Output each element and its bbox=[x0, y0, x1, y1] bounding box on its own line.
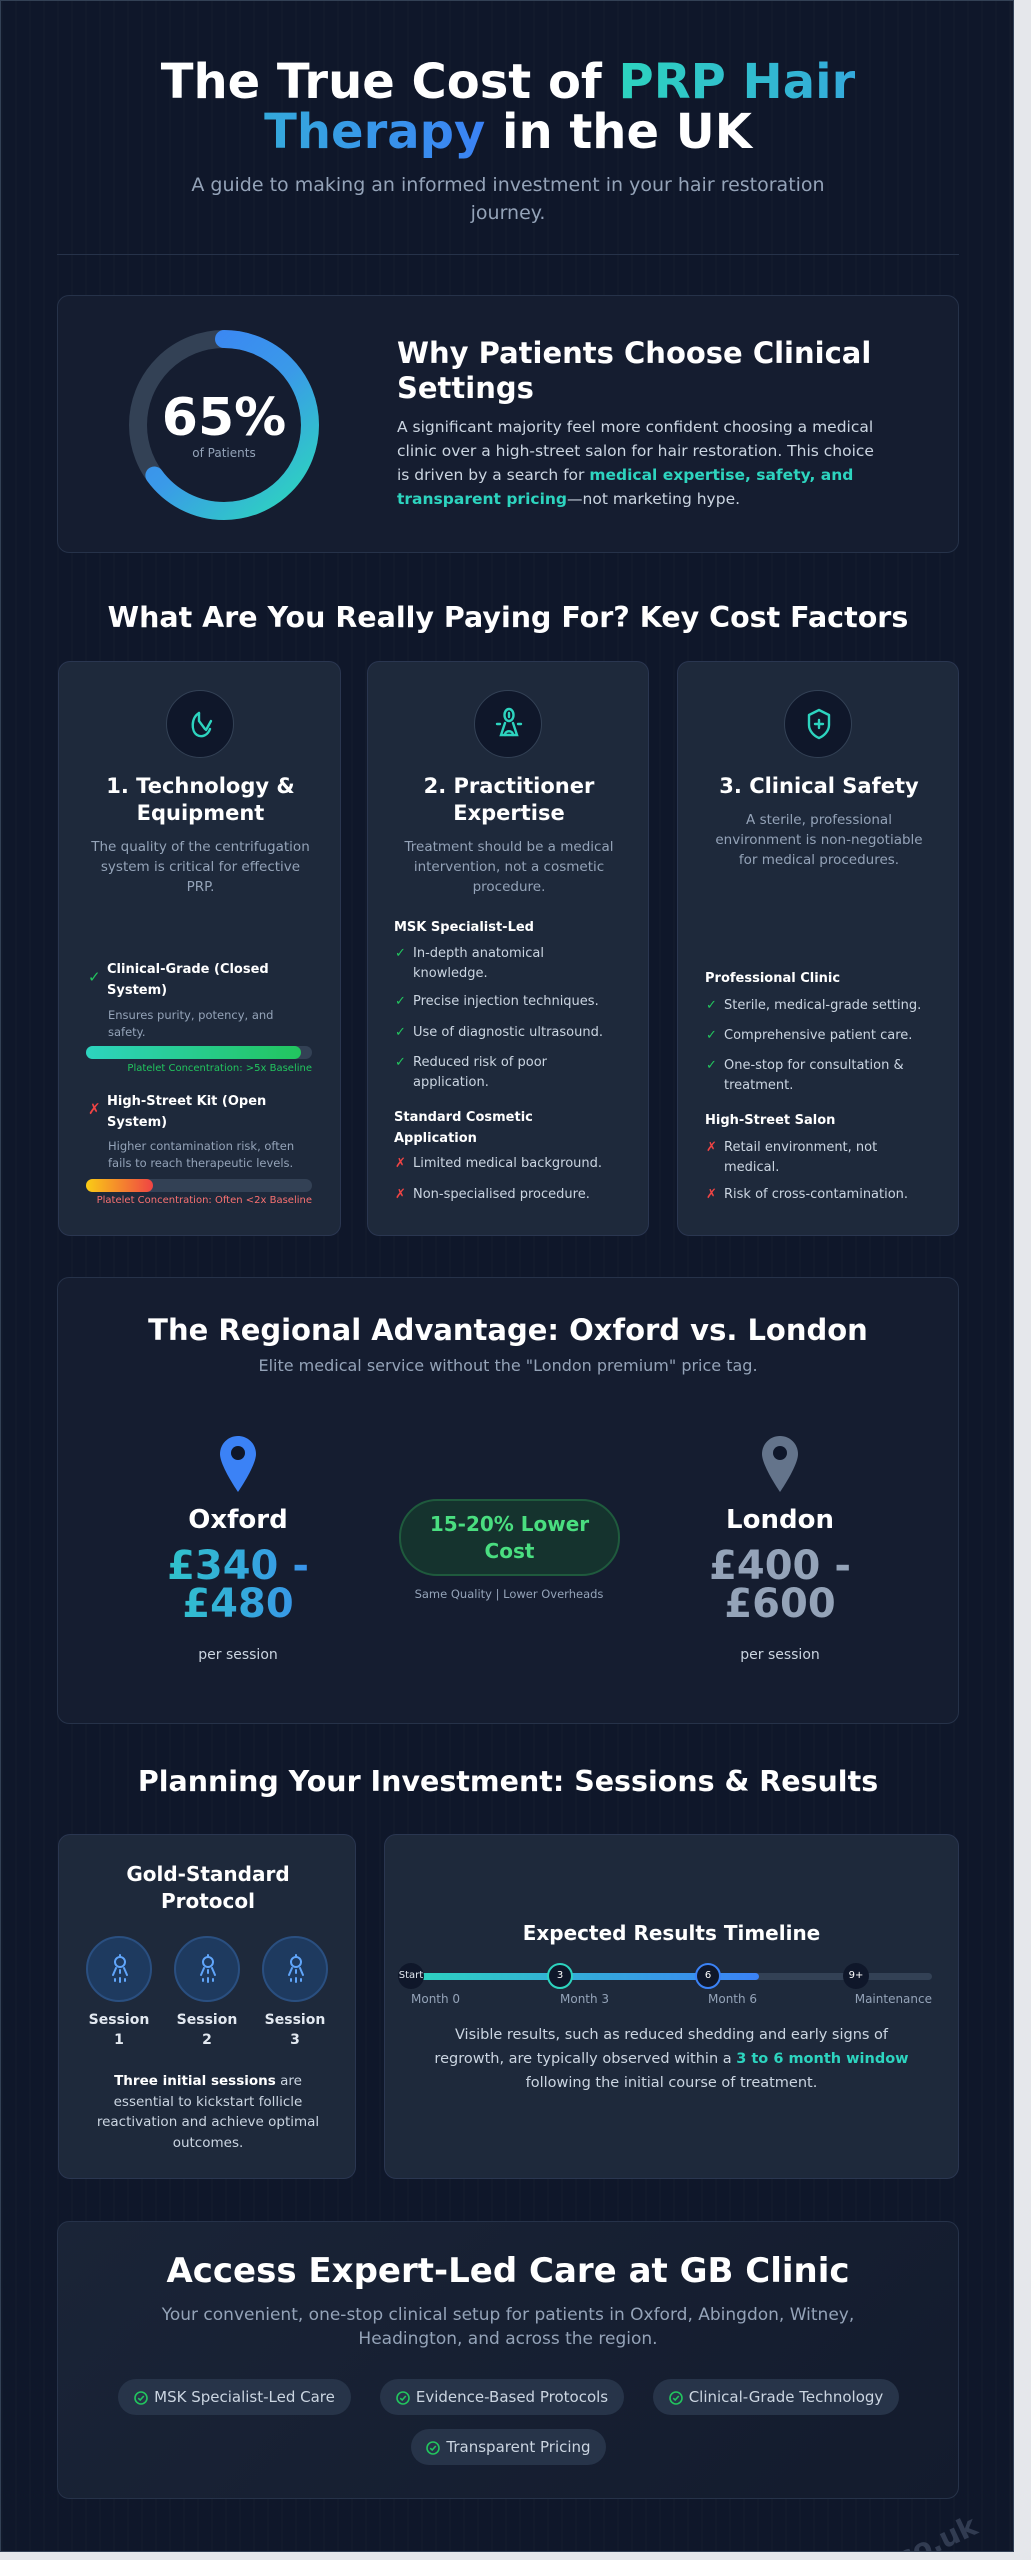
card description: A sterile, professional bbox=[746, 812, 892, 828]
text block: Visible results, such as reduced shedding and early signs of bbox=[455, 2027, 888, 2043]
heading: Access Expert-Led Care at GB Clinic bbox=[166, 2251, 850, 2291]
high street kit bbox=[107, 1094, 266, 1130]
card title: Equipment bbox=[137, 801, 264, 825]
clinical grade bbox=[107, 962, 269, 998]
card description: intervention, not a cosmetic bbox=[414, 859, 604, 875]
sessions icons: Session bbox=[177, 2012, 237, 2028]
sessions icons: 2 bbox=[202, 2032, 212, 2048]
panel: technology & equipment: Platelet Concentration: >5x Baseline bbox=[127, 1063, 312, 1074]
text block: transparent pricing—not marketing hype. bbox=[397, 490, 740, 508]
list: standard cosmetic bbox=[394, 1110, 533, 1146]
bar: clinical concentration bbox=[86, 1046, 312, 1059]
pill: MSK: MSK Specialist-Led Care bbox=[154, 2388, 335, 2406]
subtitle: A guide to making an informed investment in your hair restoration bbox=[191, 174, 825, 196]
panel: practitioner expertise: ✓ bbox=[395, 1055, 406, 1070]
card title: 1. Technology & bbox=[106, 774, 295, 798]
text block: essential to kickstart follicle bbox=[114, 2094, 302, 2110]
panel: technology & equipment: Platelet Concentration: Often <2x Baseline bbox=[97, 1195, 312, 1206]
heading: Expected Results Timeline bbox=[523, 1921, 820, 1945]
sessions icons: Session bbox=[265, 2012, 325, 2028]
card description bbox=[404, 839, 613, 895]
pill: pricing: Transparent Pricing bbox=[446, 2438, 591, 2456]
panel: practitioner expertise: Non-specialised procedure. bbox=[413, 1187, 590, 1202]
text block: reactivation and achieve optimal bbox=[97, 2114, 319, 2130]
subtitle: Headington, and across the region. bbox=[358, 2329, 658, 2349]
panel: expected results timeline: Month 3 bbox=[560, 1992, 609, 2006]
panel: technology & equipment: fails to reach therapeutic levels. bbox=[108, 1156, 293, 1170]
panel: clinical safety: ✓ bbox=[706, 1058, 717, 1073]
Oxford price bbox=[167, 1505, 309, 1663]
panel: clinical safety: One-stop for consultation & bbox=[724, 1058, 904, 1073]
panel: practitioner expertise: Precise injection techniques. bbox=[413, 994, 599, 1009]
icon: practitioner bbox=[474, 690, 542, 758]
card description: procedure. bbox=[473, 879, 545, 895]
card description: environment is non-negotiable bbox=[715, 832, 923, 848]
text block: regrowth, are typically observed within a 3 to 6 month window bbox=[434, 2051, 909, 2067]
panel: practitioner expertise: ✗ bbox=[395, 1156, 406, 1171]
panel: clinical safety: Sterile, medical-grade setting. bbox=[724, 998, 921, 1013]
text block bbox=[434, 2027, 909, 2091]
card title bbox=[424, 774, 594, 825]
text block bbox=[397, 418, 874, 508]
pill: technology bbox=[653, 2379, 899, 2415]
sessions icons: 3 bbox=[290, 2032, 300, 2048]
card title: Expertise bbox=[453, 801, 565, 825]
subtitle bbox=[191, 174, 825, 224]
list: high-street salon: High-Street Salon bbox=[705, 1113, 835, 1128]
panel: clinical safety: treatment. bbox=[724, 1078, 793, 1093]
heading: The Regional Advantage: Oxford vs. London bbox=[148, 1313, 868, 1347]
heading: key cost factors: What Are You Really Paying For? Key Cost Factors bbox=[108, 601, 908, 634]
pill: evidence bbox=[380, 2379, 624, 2415]
title: The True Cost of PRP Hair bbox=[161, 54, 855, 110]
pill: technology: Clinical-Grade Technology bbox=[689, 2388, 883, 2406]
donut chart: 65% bbox=[129, 330, 319, 520]
heading bbox=[126, 1862, 290, 1913]
text block: is driven by a search for medical expertise, safety, and bbox=[397, 466, 853, 484]
timeline: 3 bbox=[557, 1970, 563, 1981]
panel: clinical safety: ✗ bbox=[706, 1140, 717, 1155]
text block: Three initial sessions are bbox=[114, 2073, 302, 2089]
panel: technology & equipment: ✓ bbox=[88, 968, 101, 986]
London price bbox=[709, 1505, 851, 1663]
panel: expected results timeline: Maintenance bbox=[855, 1992, 932, 2006]
sessions icons: Session bbox=[89, 2012, 149, 2028]
clinical grade: Clinical-Grade (Closed bbox=[107, 962, 269, 977]
panel: why patients choose clinical settings bbox=[57, 295, 959, 553]
card title: 2. Practitioner bbox=[424, 774, 594, 798]
text block: A significant majority feel more confident choosing a medical bbox=[397, 418, 873, 436]
bar: high-street concentration bbox=[86, 1179, 312, 1192]
heading bbox=[397, 336, 871, 405]
text block: following the initial course of treatment. bbox=[526, 2075, 817, 2091]
icon: centrifuge bbox=[166, 690, 234, 758]
pill: evidence: Evidence-Based Protocols bbox=[416, 2388, 608, 2406]
card title: 3. Clinical Safety bbox=[719, 774, 919, 798]
title bbox=[160, 54, 855, 160]
panel: practitioner expertise: ✓ bbox=[395, 946, 406, 961]
text block: clinic over a high-street salon for hair restoration. This choice bbox=[397, 442, 874, 460]
timeline bbox=[398, 1963, 932, 1989]
panel: gold-standard protocol bbox=[58, 1834, 356, 2179]
panel: practitioner expertise: Use of diagnostic ultrasound. bbox=[413, 1025, 603, 1040]
timeline: 6 bbox=[705, 1970, 711, 1981]
sessions icons bbox=[86, 1936, 328, 2048]
heading: Gold-Standard bbox=[126, 1862, 290, 1886]
panel: technology & equipment: Ensures purity, potency, and bbox=[108, 1008, 273, 1022]
panel: practitioner expertise: knowledge. bbox=[413, 966, 488, 981]
pill: MSK bbox=[118, 2379, 351, 2415]
sessions icons: 1 bbox=[114, 2032, 124, 2048]
high street kit: System) bbox=[107, 1115, 167, 1130]
Oxford price: Oxford bbox=[188, 1505, 288, 1535]
panel: technology & equipment bbox=[58, 661, 341, 1236]
card description bbox=[91, 839, 310, 895]
heading: Settings bbox=[397, 371, 534, 405]
panel: technology & equipment: Higher contamination risk, often bbox=[108, 1139, 294, 1153]
card description: Treatment should be a medical bbox=[405, 839, 613, 855]
timeline: Start bbox=[399, 1970, 423, 1981]
panel: expected results timeline bbox=[384, 1834, 959, 2179]
panel: expected results timeline: Month 6 bbox=[708, 1992, 757, 2006]
panel: clinical safety: medical. bbox=[724, 1160, 779, 1175]
pill: pricing bbox=[411, 2429, 606, 2465]
list: standard cosmetic: Standard Cosmetic bbox=[394, 1110, 533, 1125]
subtitle bbox=[162, 2305, 854, 2349]
panel: practitioner expertise: Limited medical background. bbox=[413, 1156, 602, 1171]
panel: practitioner expertise bbox=[367, 661, 649, 1236]
Oxford price: £340 - bbox=[167, 1543, 309, 1589]
London price: £600 bbox=[724, 1581, 836, 1627]
Oxford price: £480 bbox=[182, 1581, 294, 1627]
card description: PRP. bbox=[187, 879, 214, 895]
callout: 15-20% lower cost: Cost bbox=[485, 1539, 534, 1563]
panel: practitioner expertise: application. bbox=[413, 1075, 489, 1090]
donut chart: 65%: 65% bbox=[162, 388, 286, 448]
panel: technology & equipment: ✗ bbox=[88, 1100, 101, 1118]
heading: Why Patients Choose Clinical bbox=[397, 336, 871, 370]
text block: outcomes. bbox=[173, 2134, 243, 2150]
icon: shield bbox=[784, 690, 852, 758]
London price: London bbox=[726, 1505, 834, 1535]
panel: practitioner expertise: ✓ bbox=[395, 1025, 406, 1040]
icon: Oxford pin bbox=[220, 1436, 256, 1492]
donut chart: 65%: of Patients bbox=[192, 446, 256, 460]
panel: clinical safety: ✗ bbox=[706, 1187, 717, 1202]
panel: clinical safety: Retail environment, not bbox=[724, 1140, 877, 1155]
panel: expected results timeline: Month 0 bbox=[411, 1992, 460, 2006]
title: Therapy in the UK bbox=[264, 104, 752, 160]
heading: planning your investment: Planning Your Investment: Sessions & Results bbox=[138, 1765, 878, 1798]
card description bbox=[715, 812, 923, 868]
panel: clinical safety: ✓ bbox=[706, 998, 717, 1013]
list: professional clinic: Professional Clinic bbox=[705, 971, 840, 986]
list: MSK specialist-led: MSK Specialist-Led bbox=[394, 920, 534, 935]
panel: access expert-led care bbox=[57, 2221, 959, 2499]
clinical grade: System) bbox=[107, 983, 167, 998]
panel: practitioner expertise: In-depth anatomical bbox=[413, 946, 544, 961]
subtitle: journey. bbox=[471, 202, 545, 224]
panel: regional advantage bbox=[57, 1277, 959, 1724]
panel: practitioner expertise: ✗ bbox=[395, 1187, 406, 1202]
panel: practitioner expertise: Reduced risk of poor bbox=[413, 1055, 547, 1070]
card description: system is critical for effective bbox=[101, 859, 300, 875]
Oxford price: per session bbox=[198, 1647, 278, 1663]
London price: £400 - bbox=[709, 1543, 851, 1589]
panel: clinical safety: Risk of cross-contamination. bbox=[724, 1187, 908, 1202]
icon: London pin bbox=[762, 1436, 798, 1492]
panel: regional advantage: Same Quality | Lower Overheads bbox=[415, 1587, 603, 1601]
London price: per session bbox=[740, 1647, 820, 1663]
panel: clinical safety bbox=[677, 661, 959, 1236]
card description: for medical procedures. bbox=[739, 852, 899, 868]
panel: clinical safety: ✓ bbox=[706, 1028, 717, 1043]
panel: practitioner expertise: ✓ bbox=[395, 994, 406, 1009]
panel: technology & equipment: safety. bbox=[108, 1025, 146, 1039]
panel: clinical safety: Comprehensive patient care. bbox=[724, 1028, 912, 1043]
list: standard cosmetic: Application bbox=[394, 1131, 477, 1146]
subtitle: Elite medical service without the "London premium" price tag. bbox=[258, 1356, 758, 1375]
card title bbox=[106, 774, 295, 825]
callout: 15-20% lower cost bbox=[399, 1499, 620, 1576]
timeline: 9+ bbox=[849, 1970, 863, 1981]
heading: Protocol bbox=[161, 1889, 255, 1913]
card description: The quality of the centrifugation bbox=[91, 839, 310, 855]
text block bbox=[97, 2073, 319, 2150]
subtitle: Your convenient, one-stop clinical setup for patients in Oxford, Abingdon, Witney, bbox=[162, 2305, 854, 2325]
callout: 15-20% lower cost: 15-20% Lower bbox=[430, 1512, 589, 1536]
high street kit: High-Street Kit (Open bbox=[107, 1094, 266, 1109]
